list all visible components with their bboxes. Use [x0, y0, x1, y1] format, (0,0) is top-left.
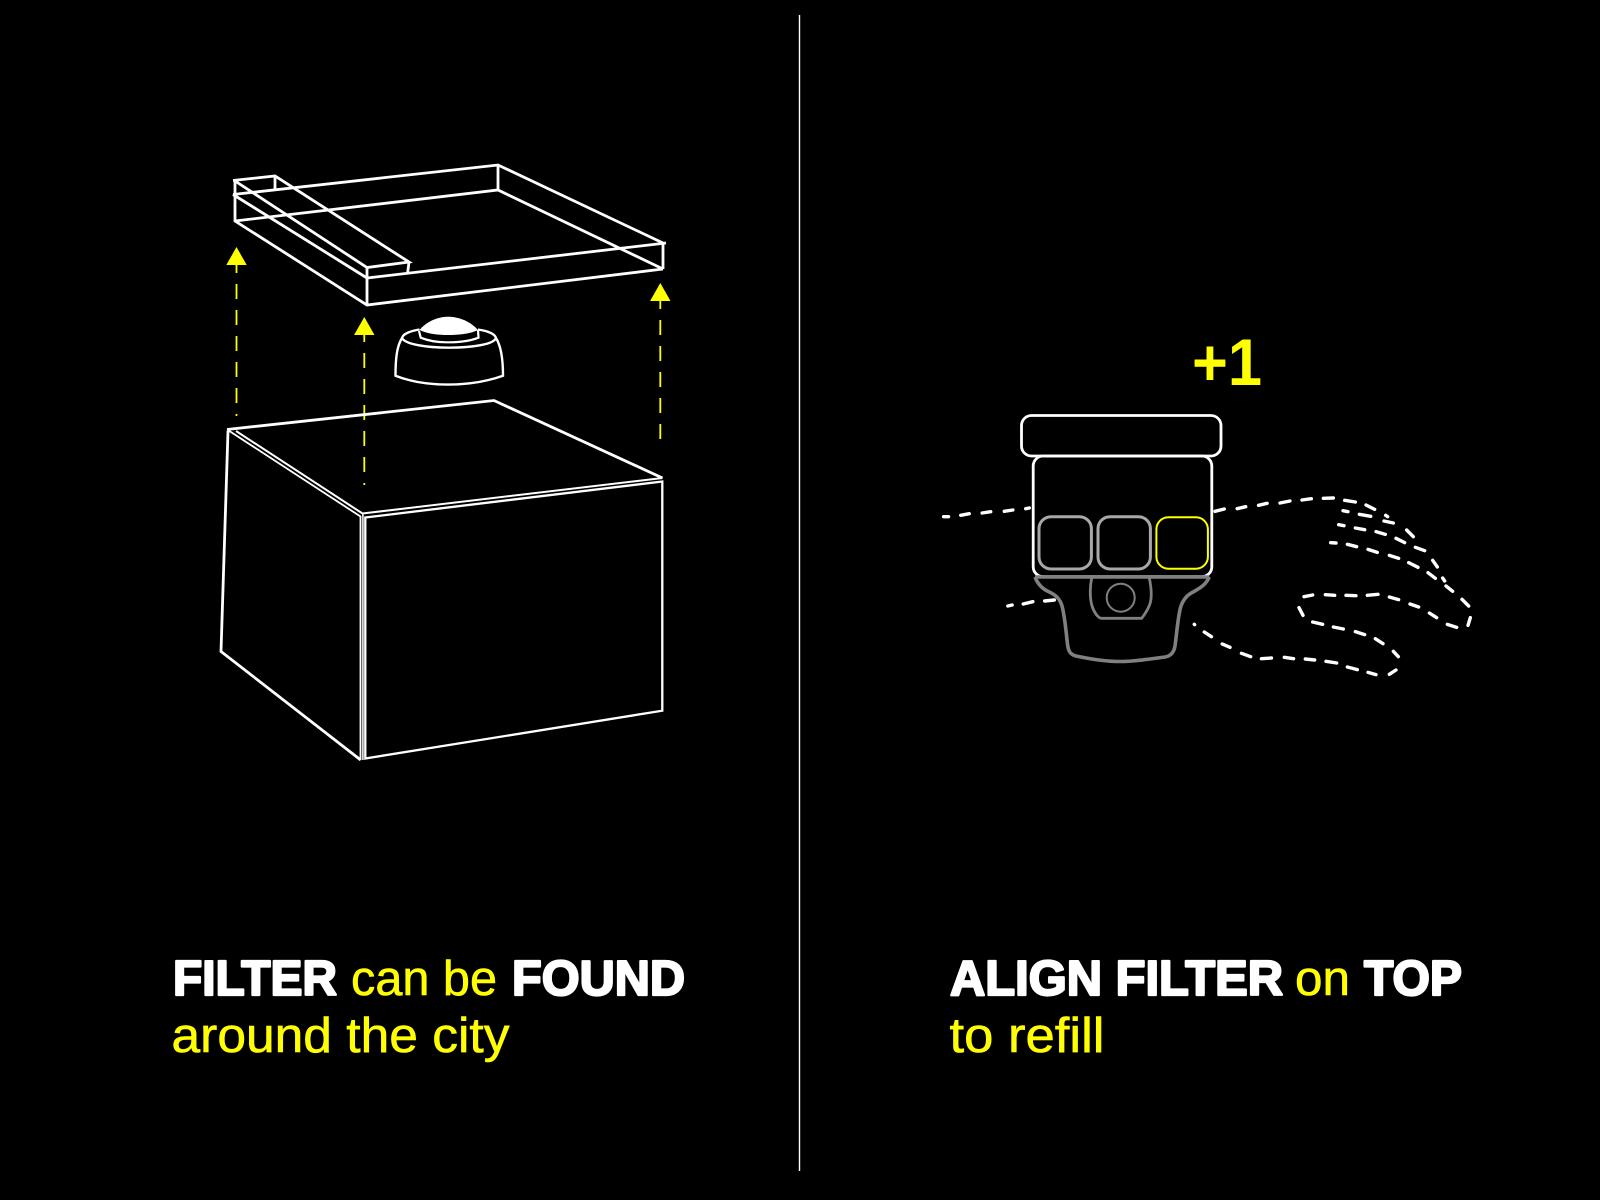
filter cartridge on top — [1022, 416, 1221, 456]
caption: filter can be found: FILTER — [173, 952, 337, 1006]
caption: filter can be found — [172, 952, 685, 1063]
caption: align filter on top: ALIGN FILTER — [950, 952, 1283, 1006]
label: plus one: +1 — [1192, 325, 1262, 399]
slot three: highlighted — [1156, 517, 1208, 569]
hand outline: wrist and lower edge dashes — [944, 501, 1294, 659]
slot two — [1098, 517, 1150, 569]
caption: align filter on top: to refill — [950, 1009, 1104, 1063]
slot one — [1039, 517, 1091, 569]
caption: filter can be found: FOUND — [512, 952, 685, 1006]
caption: align filter on top — [950, 952, 1462, 1063]
filter station box — [221, 400, 662, 760]
filter tray lid — [233, 165, 666, 305]
caption: align filter on top: on — [1295, 952, 1350, 1006]
device body — [1033, 456, 1212, 577]
hand outline: finger dashes — [1299, 498, 1470, 675]
arrow: middle lift — [354, 317, 374, 485]
illustration: exploded filter box — [221, 165, 670, 760]
caption: filter can be found: around the city — [172, 1009, 510, 1063]
panel: align filter on top — [944, 325, 1470, 1063]
illustration: wrist device with filter — [944, 416, 1470, 675]
filter cartridge dome — [396, 317, 503, 385]
caption: align filter on top: TOP — [1364, 952, 1462, 1006]
arrow: right lift — [650, 283, 670, 445]
device strap base — [1035, 577, 1209, 662]
panel: filter can be found — [172, 165, 685, 1063]
caption: filter can be found: can be — [351, 952, 497, 1006]
arrow: left lift — [226, 247, 247, 416]
